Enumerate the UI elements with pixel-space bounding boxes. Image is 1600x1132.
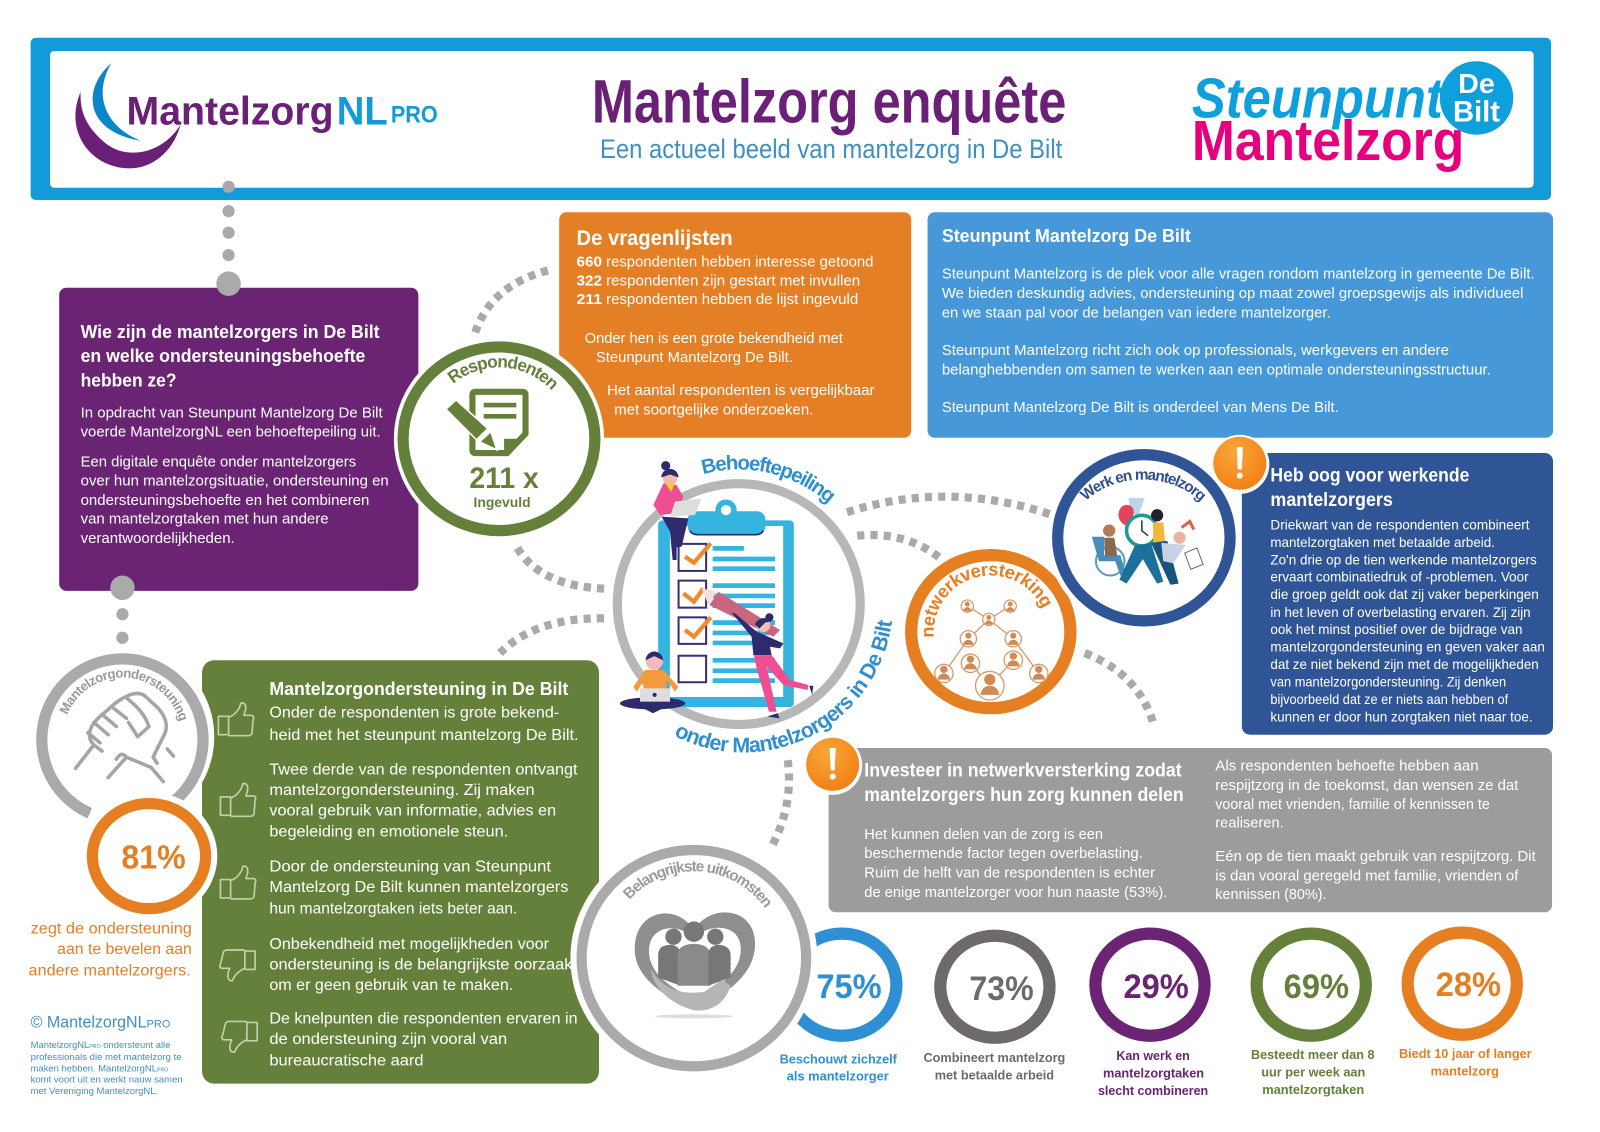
text: point 3: hun mantelzorgtaken iets beter aan.	[269, 900, 517, 917]
text: point 2: Twee derde van de respondenten ontvangt	[269, 761, 578, 778]
label: 73 percent: met betaalde arbeid	[935, 1068, 1054, 1083]
arc label: behoeftepeiling: Behoeftepeiling	[701, 454, 834, 505]
text: intro body: In opdracht van Steunpunt Mantelzorg De Bilt	[81, 405, 383, 421]
text: point 5: bureaucratische aard	[269, 1052, 423, 1069]
icon: man with laptop cross-legged	[620, 652, 685, 713]
text: 81 percent caption: andere mantelzorgers.	[29, 963, 191, 980]
text: respondent counts: respondenten zijn gestart met invullen	[606, 274, 860, 290]
badge: netwerkversterking	[905, 549, 1077, 714]
panel: purple intro	[59, 288, 418, 591]
text: intro body: over hun mantelzorgsituatie, ondersteuning en	[81, 474, 389, 490]
text: intro body: van mantelzorgtaken met hun andere	[81, 511, 329, 527]
label: 73 percent	[923, 1050, 1065, 1083]
icon: network of people	[935, 600, 1048, 700]
label: 75 percent: als mantelzorger	[787, 1069, 889, 1084]
text: right column: Eén op de tien maakt gebruik van respijtzorg. Dit	[1215, 849, 1536, 865]
text: respondent counts: 211	[577, 292, 602, 308]
text: steunpunt body: We bieden deskundig advies, ondersteuning op maat zowel groepsgewijs als individueel	[942, 286, 1523, 302]
icon: clipboard	[658, 499, 794, 707]
text: vragenlijsten notes: Onder hen is een grote bekendheid met	[585, 331, 843, 347]
text: respondent counts: respondenten hebben de lijst ingevuld	[606, 292, 858, 308]
text: point 4: ondersteuning is de belangrijkste oorzaak	[269, 956, 573, 973]
panel: netwerkversterking grey	[829, 748, 1552, 912]
title: Mantelzorg enquête	[592, 67, 1066, 135]
panel: steunpunt mantelzorg	[928, 212, 1553, 438]
text: steunpunt body: Steunpunt Mantelzorg is de plek voor alle vragen rondom mantelzorg in gemeente De Bilt.	[942, 267, 1535, 283]
arc label: belangrijkste uitkomsten: Belangrijkste uitkomsten	[622, 861, 770, 908]
text: right column: Als respondenten behoefte hebben aan	[1215, 758, 1479, 774]
heading: intro: hebben ze?	[81, 370, 177, 391]
text: 81 percent caption: aan te bevelen aan	[57, 941, 192, 958]
text: point 3: Mantelzorg De Bilt kunnen mantelzorgers	[269, 879, 568, 896]
text: werkende body	[1270, 518, 1545, 724]
text: intro body	[81, 405, 389, 547]
badge: central behoeftepeiling illustration	[612, 454, 892, 752]
text: intro body: voerde MantelzorgNL een behoeftepeiling uit.	[81, 425, 381, 441]
icon: thumbs down 1	[220, 950, 255, 981]
label: 29 percent: mantelzorgtaken	[1103, 1066, 1204, 1081]
heading: investeer: Investeer in netwerkversterking zodat	[864, 760, 1182, 782]
text: point 5: De knelpunten die respondenten ervaren in	[269, 1010, 578, 1027]
panel: de vragenlijsten	[559, 212, 911, 438]
heading: werkende: mantelzorgers	[1270, 489, 1393, 511]
text: left column	[864, 827, 1167, 901]
text: about MantelzorgNL: professionals die met mantelzorg te	[31, 1052, 182, 1062]
badge: belangrijkste uitkomsten	[570, 844, 817, 1072]
logo: Steunpunt Mantelzorg De Bilt: Bilt	[1453, 95, 1500, 128]
text: point 4: om er geen gebruik van te maken.	[269, 977, 513, 994]
text: intro body: verantwoordelijkheden.	[81, 531, 235, 547]
text: werkende body: dat ze niet bekend zijn met de mogelijkheden	[1270, 657, 1539, 672]
text: left column: Ruim de helft van de respondenten is echter	[864, 866, 1155, 882]
label: 69 percent	[1251, 1047, 1374, 1097]
label: 28 percent: mantelzorg	[1431, 1064, 1499, 1079]
text: werkende body: kunnen er door hun zorgtaken niet naar toe.	[1270, 709, 1533, 724]
heading: steunpunt: Steunpunt Mantelzorg De Bilt	[942, 225, 1191, 246]
text: werkende body: mantelzorgtaken met betaalde arbeid.	[1270, 535, 1495, 550]
stat: 69 percent	[1257, 934, 1366, 1036]
logo: MantelzorgNL PRO: PRO	[391, 101, 438, 128]
text: point 1: Onder de respondenten is grote bekend-	[269, 704, 559, 721]
text: 81 percent caption: zegt de ondersteuning	[31, 921, 192, 938]
heading: werkende	[1270, 465, 1470, 511]
stat: 28 percent	[1408, 933, 1517, 1035]
text: werkende body: Zo'n drie op de tien werkende mantelzorgers	[1270, 552, 1537, 567]
badge: 81 percent	[81, 792, 217, 920]
stat: 29 percent	[1095, 934, 1205, 1036]
text: werkende body: die groep geldt ook dat zij vaker beperkingen	[1270, 587, 1539, 602]
text: point 2: vooral gebruik van informatie, advies en	[269, 802, 556, 819]
stat: 28 percent: 28%	[1436, 966, 1501, 1004]
heading: vragenlijsten: De vragenlijsten	[577, 226, 733, 250]
text: about MantelzorgNL: komt voort uit en werkt nauw samen	[31, 1075, 183, 1085]
icon: clasped hands	[76, 693, 173, 782]
stat: 69 percent: 69%	[1284, 968, 1349, 1006]
text: vragenlijsten notes: Het aantal respondenten is vergelijkbaar	[607, 383, 875, 399]
text: steunpunt body	[942, 267, 1535, 416]
text: werkende body: van mantelzorgondersteuning. Zij denken	[1270, 675, 1506, 690]
text: about MantelzorgNL: maken hebben. MantelzorgNL PRO	[31, 1063, 168, 1073]
text: steunpunt body: Steunpunt Mantelzorg De Bilt is onderdeel van Mens De Bilt.	[942, 400, 1339, 416]
label: 69 percent: Besteedt meer dan 8	[1251, 1047, 1374, 1062]
text: point 2: mantelzorgondersteuning. Zij maken	[269, 782, 535, 799]
label: 75 percent: Beschouwt zichzelf	[780, 1051, 897, 1066]
logo: Steunpunt Mantelzorg De Bilt: De	[1458, 68, 1495, 99]
icon: alert werkende	[1210, 435, 1269, 494]
text: about MantelzorgNL: MantelzorgNL PRO ondersteunt alle	[31, 1040, 170, 1050]
icon: thumbs up 1	[218, 703, 254, 736]
text: respondent counts: respondenten hebben interesse getoond	[606, 254, 873, 270]
text: copyright: © MantelzorgNLPRO	[31, 1014, 171, 1032]
icon: form and pencil	[446, 392, 526, 455]
text: point 2: begeleiding en emotionele steun.	[269, 824, 508, 841]
logo: MantelzorgNL PRO	[75, 63, 438, 168]
arc label: mantelzorgondersteuning: Mantelzorgondersteuning	[59, 670, 186, 722]
text: point 1	[269, 704, 579, 744]
label: 28 percent	[1399, 1046, 1532, 1079]
label: 29 percent	[1098, 1048, 1208, 1098]
text: right column: is dan vooral geregeld met familie, vrienden of	[1215, 869, 1519, 885]
text: right column	[1215, 758, 1536, 903]
logo: Steunpunt Mantelzorg De Bilt	[1192, 61, 1513, 172]
heading: investeer: mantelzorgers hun zorg kunnen delen	[864, 784, 1184, 806]
arc label: onder mantelzorgers in de bilt: onder Mantelzorgers in De Bilt	[676, 620, 892, 752]
stat: 75 percent: 75%	[816, 968, 882, 1006]
text: vragenlijsten notes	[585, 331, 875, 418]
icon: thumbs up 2	[220, 784, 256, 816]
header band	[31, 38, 1551, 200]
label: 28 percent: Biedt 10 jaar of langer	[1399, 1046, 1532, 1061]
text: left column: de enige mantelzorger voor hun naaste (53%).	[864, 885, 1167, 901]
label: 69 percent: uur per week aan	[1261, 1065, 1365, 1080]
stat: 73 percent	[940, 936, 1049, 1038]
text: respondent counts: 660	[577, 254, 602, 270]
text: steunpunt body: Steunpunt Mantelzorg richt zich ook op professionals, werkgevers en andere	[942, 343, 1449, 359]
text: werkende body: Driekwart van de respondenten combineert	[1270, 518, 1530, 533]
panel: mantelzorgondersteuning green	[202, 660, 599, 1084]
text: left column: Het kunnen delen van de zorg is een	[864, 827, 1103, 843]
label: 29 percent: Kan werk en	[1116, 1048, 1190, 1063]
icon: alert netwerk	[803, 736, 862, 795]
arc label: netwerkversterking: netwerkversterking	[924, 564, 1051, 636]
arc label: werk en mantelzorg: Werk en mantelzorg	[1079, 471, 1206, 502]
text: respondent counts	[577, 254, 873, 308]
stat: 73 percent: 73%	[969, 970, 1034, 1008]
text: right column: vooral met vrienden, familie of kennissen te	[1215, 797, 1490, 813]
heading: intro: Wie zijn de mantelzorgers in De Bilt	[81, 321, 380, 342]
heading: investeer	[864, 760, 1184, 806]
logo: MantelzorgNL PRO: NL	[337, 89, 388, 133]
icon: woman with laptop sitting	[653, 461, 702, 560]
icon: people, clock and wheelchair	[1092, 498, 1203, 585]
text: point 1: heid met het steunpunt mantelzorg De Bilt.	[269, 727, 579, 744]
text: point 4	[269, 936, 573, 994]
text: intro body: Een digitale enquête onder mantelzorgers	[81, 454, 356, 470]
text: steunpunt body: en we staan pal voor de belangen van iedere mantelzorger.	[942, 305, 1331, 321]
text: 81 percent caption	[29, 921, 192, 980]
connector dots: header to purple panel	[222, 181, 235, 261]
label: 69 percent: mantelzorgtaken	[1262, 1082, 1364, 1097]
text: right column: realiseren.	[1215, 816, 1284, 832]
icon: heart with people and hand	[635, 912, 755, 1018]
heading: ondersteuning: Mantelzorgondersteuning in De Bilt	[269, 678, 568, 699]
dashed connectors	[474, 270, 1153, 849]
badge: mantelzorgondersteuning circle	[36, 653, 214, 818]
text: werkende body: mantelzorgondersteuning en geven vaker aan	[1270, 640, 1545, 655]
logo: Steunpunt Mantelzorg De Bilt: Mantelzorg	[1192, 109, 1464, 172]
heading: intro: en welke ondersteuningsbehoefte	[81, 345, 365, 366]
text: about MantelzorgNL: met Vereniging MantelzorgNL.	[31, 1086, 158, 1096]
text: werkende body: ook het minst positief over de bijdrage van	[1270, 622, 1522, 637]
icon: woman with pencil	[702, 588, 813, 718]
number: 211 x: 211 x	[469, 462, 539, 495]
logo: Steunpunt Mantelzorg De Bilt: Steunpunt	[1192, 66, 1445, 129]
panel: werkende mantelzorgers	[1242, 453, 1553, 735]
icon: thumbs up 3	[220, 866, 256, 899]
logo: MantelzorgNL PRO: Mantelzorg	[127, 89, 334, 133]
text: about MantelzorgNL	[31, 1040, 183, 1096]
text: vragenlijsten notes: met soortgelijke onderzoeken.	[614, 402, 813, 418]
label: 73 percent: Combineert mantelzorg	[923, 1050, 1065, 1065]
text: werkende body: bijvoorbeeld dat ze er niets aan hebben of	[1270, 692, 1508, 707]
subtitle: Een actueel beeld van mantelzorg in De Bilt	[600, 134, 1063, 164]
stat: 75 percent	[787, 934, 896, 1036]
text: point 2	[269, 761, 578, 841]
arc label: respondenten: Respondenten	[447, 356, 556, 390]
text: right column: kennissen (80%).	[1215, 887, 1327, 903]
text: vragenlijsten notes: Steunpunt Mantelzorg De Bilt.	[596, 350, 793, 366]
text: werkende body: in het leven of overbelasting ervaren. Zij zijn	[1270, 605, 1531, 620]
text: respondent counts: 322	[577, 274, 602, 290]
heading: intro	[81, 321, 380, 391]
text: point 5	[269, 1010, 578, 1069]
text: intro body: ondersteuningsbehoefte en het combineren	[81, 493, 369, 509]
text: left column: beschermende factor tegen overbelasting.	[864, 846, 1143, 862]
label: 75 percent	[780, 1051, 897, 1084]
badge: respondenten	[394, 341, 604, 536]
stat: 29 percent: 29%	[1123, 968, 1189, 1006]
badge: werk en mantelzorg	[1052, 449, 1236, 626]
large connector dots	[110, 271, 241, 644]
label: ingevuld: Ingevuld	[473, 495, 531, 511]
text: right column: respijtzorg in de toekomst, dan wensen ze dat	[1215, 778, 1518, 794]
text: point 3	[269, 858, 568, 917]
text: point 4: Onbekendheid met mogelijkheden voor	[269, 936, 549, 953]
text: point 5: de ondersteuning zijn vooral van	[269, 1031, 507, 1048]
badge: 81 percent: 81%	[121, 839, 186, 876]
label: 29 percent: slecht combineren	[1098, 1083, 1208, 1098]
icon: thumbs down 2	[222, 1021, 257, 1052]
heading: werkende: Heb oog voor werkende	[1270, 465, 1470, 487]
text: point 3: Door de ondersteuning van Steunpunt	[269, 858, 552, 875]
text: werkende body: ervaart combinatiedruk of -problemen. Voor	[1270, 570, 1529, 585]
text: steunpunt body: belanghebbenden om samen te werken aan een optimale ondersteuningsstructuur.	[942, 362, 1491, 378]
